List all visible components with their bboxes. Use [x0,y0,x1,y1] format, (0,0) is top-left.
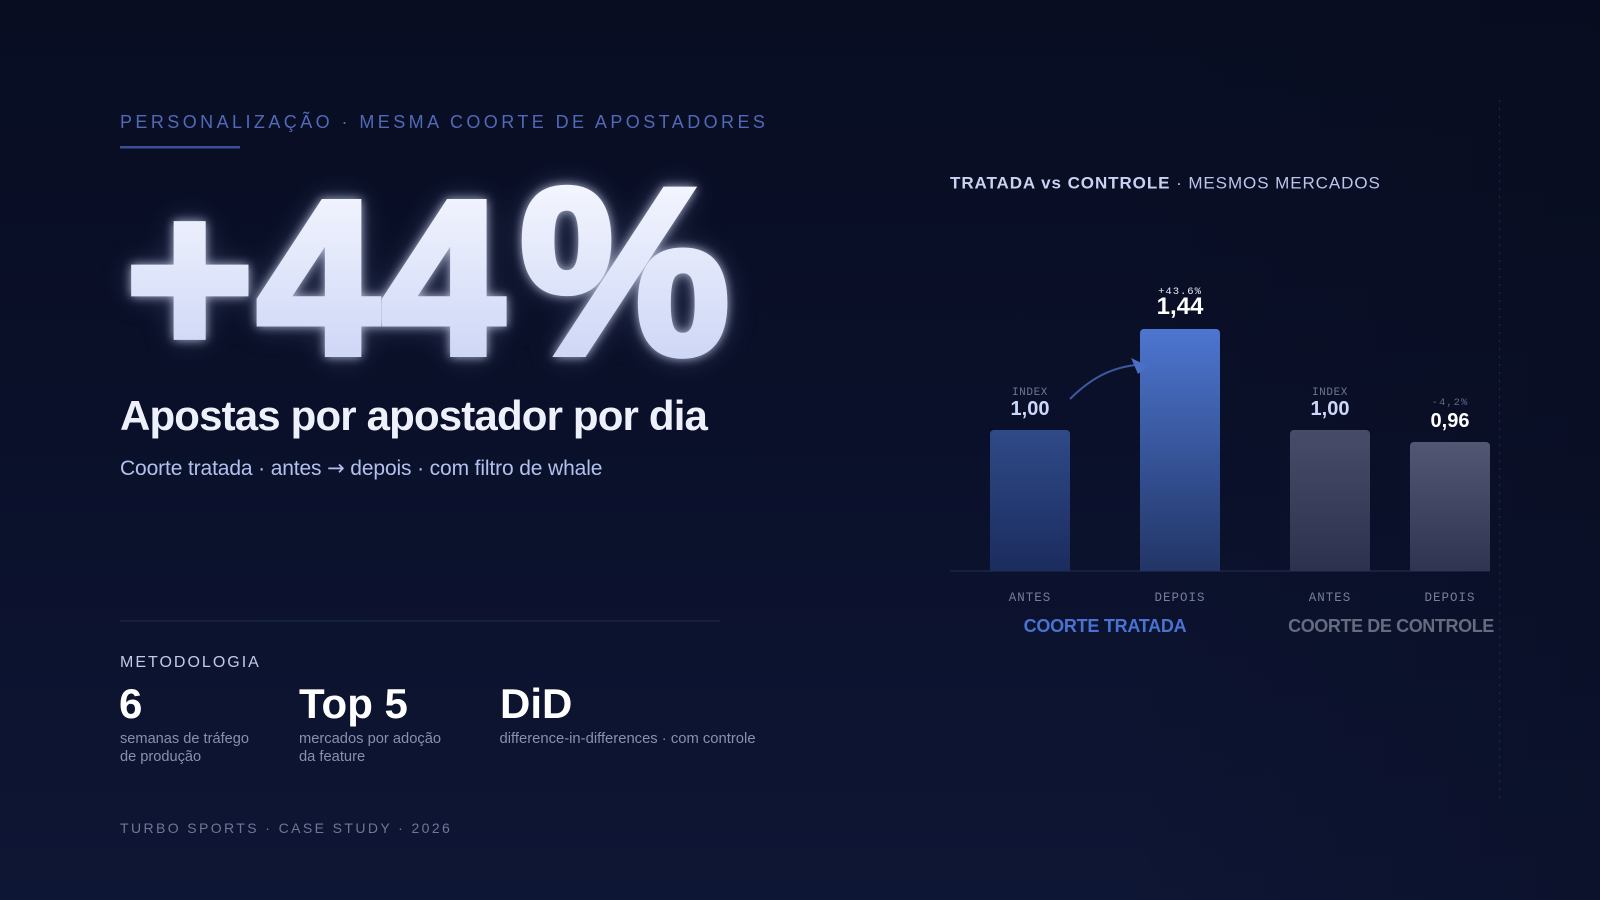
bar: treated before [990,387,1070,605]
stat: 6 weeks: semanas de tráfego [120,731,249,747]
bar: treated after: DEPOIS [1154,591,1206,605]
group label: control cohort: COORTE DE CONTROLE [1288,616,1494,636]
subheading: Coorte tratada · antes → depois · com filtro de whale [120,456,602,480]
stat: 6 weeks [119,680,249,765]
stat: 6 weeks: 6 [119,680,142,727]
stat: 6 weeks: de produção [120,749,201,765]
bar: control after: 0,96 [1431,410,1469,432]
bar: treated before: INDEX [1012,387,1048,399]
chart title: TRATADA vs CONTROLE · MESMOS MERCADOS [950,174,1381,192]
group label: treated cohort: COORTE TRATADA [1024,616,1187,636]
bar: control after: -4,2% [1432,397,1468,409]
bar: control before: INDEX [1312,387,1348,399]
headline: Apostas por apostador por dia [120,392,709,439]
stat: top 5 markets: mercados por adoção [299,731,441,747]
bar chart [950,286,1494,636]
methodology label: METODOLOGIA [120,654,261,671]
bar: control before: 1,00 [1311,398,1349,420]
bar: treated after: 1,44 [1157,293,1204,320]
big number: +44% [126,140,734,404]
arrow: before to after [1070,358,1148,399]
methodology section [119,654,756,765]
stat: top 5 markets: da feature [299,749,365,765]
stat: top 5 markets [299,680,441,765]
footer: TURBO SPORTS · CASE STUDY · 2026 [120,820,452,836]
bar: control after [1410,397,1490,605]
bar: treated before: ANTES [1009,591,1051,605]
bar: control after: DEPOIS [1424,591,1476,605]
bar: control before: ANTES [1309,591,1351,605]
eyebrow underline [120,146,240,148]
bar: treated after [1140,286,1220,605]
bar: control before [1290,387,1370,605]
eyebrow heading: PERSONALIZAÇÃO · MESMA COORTE DE APOSTADORES [120,111,768,132]
stat: DiD: difference-in-differences · com controle [500,731,756,747]
stat: DiD [500,680,756,747]
stat: DiD: DiD [500,680,572,727]
bar: treated before: 1,00 [1011,398,1049,420]
bar: treated after: +43.6% [1158,286,1202,298]
stat: top 5 markets: Top 5 [299,680,408,727]
